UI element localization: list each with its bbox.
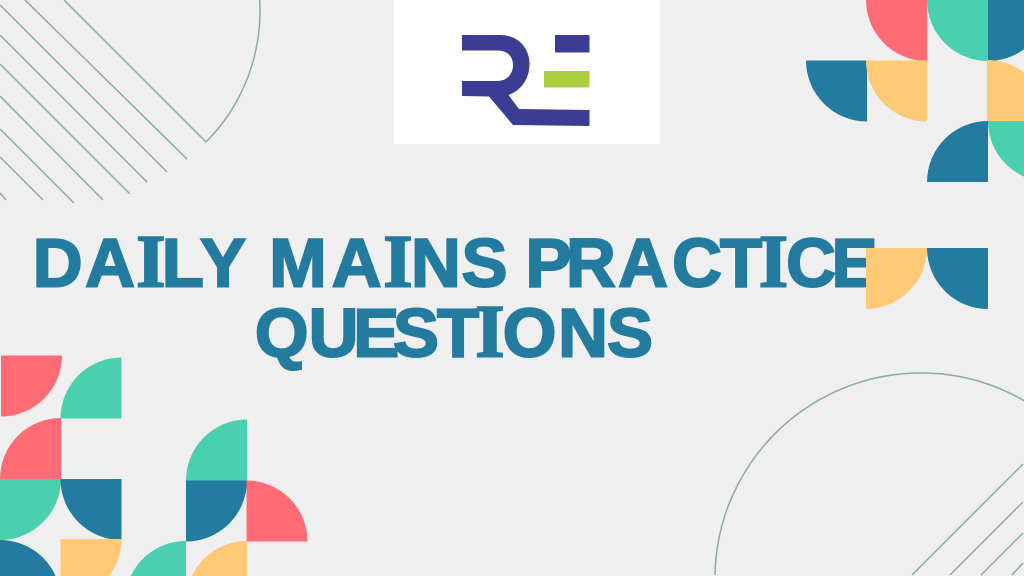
title: QUESTIONS <box>255 291 653 374</box>
logo: RE mark on white panel <box>394 0 660 144</box>
title: DAILY MAINS PRACTICE <box>33 220 878 303</box>
decoration: bottom-left quarter-circle cluster <box>0 356 122 576</box>
line art: bottom-right circle with diagonal stripes <box>715 373 1024 575</box>
decoration: top-right quarter-circle cluster <box>806 0 1024 182</box>
line art: top-left circle with diagonal stripes <box>0 0 260 203</box>
title <box>33 220 878 374</box>
decoration: bottom-centre quarter-circle cluster <box>131 420 308 576</box>
decoration: right-side quarter-circle pair <box>866 248 988 309</box>
